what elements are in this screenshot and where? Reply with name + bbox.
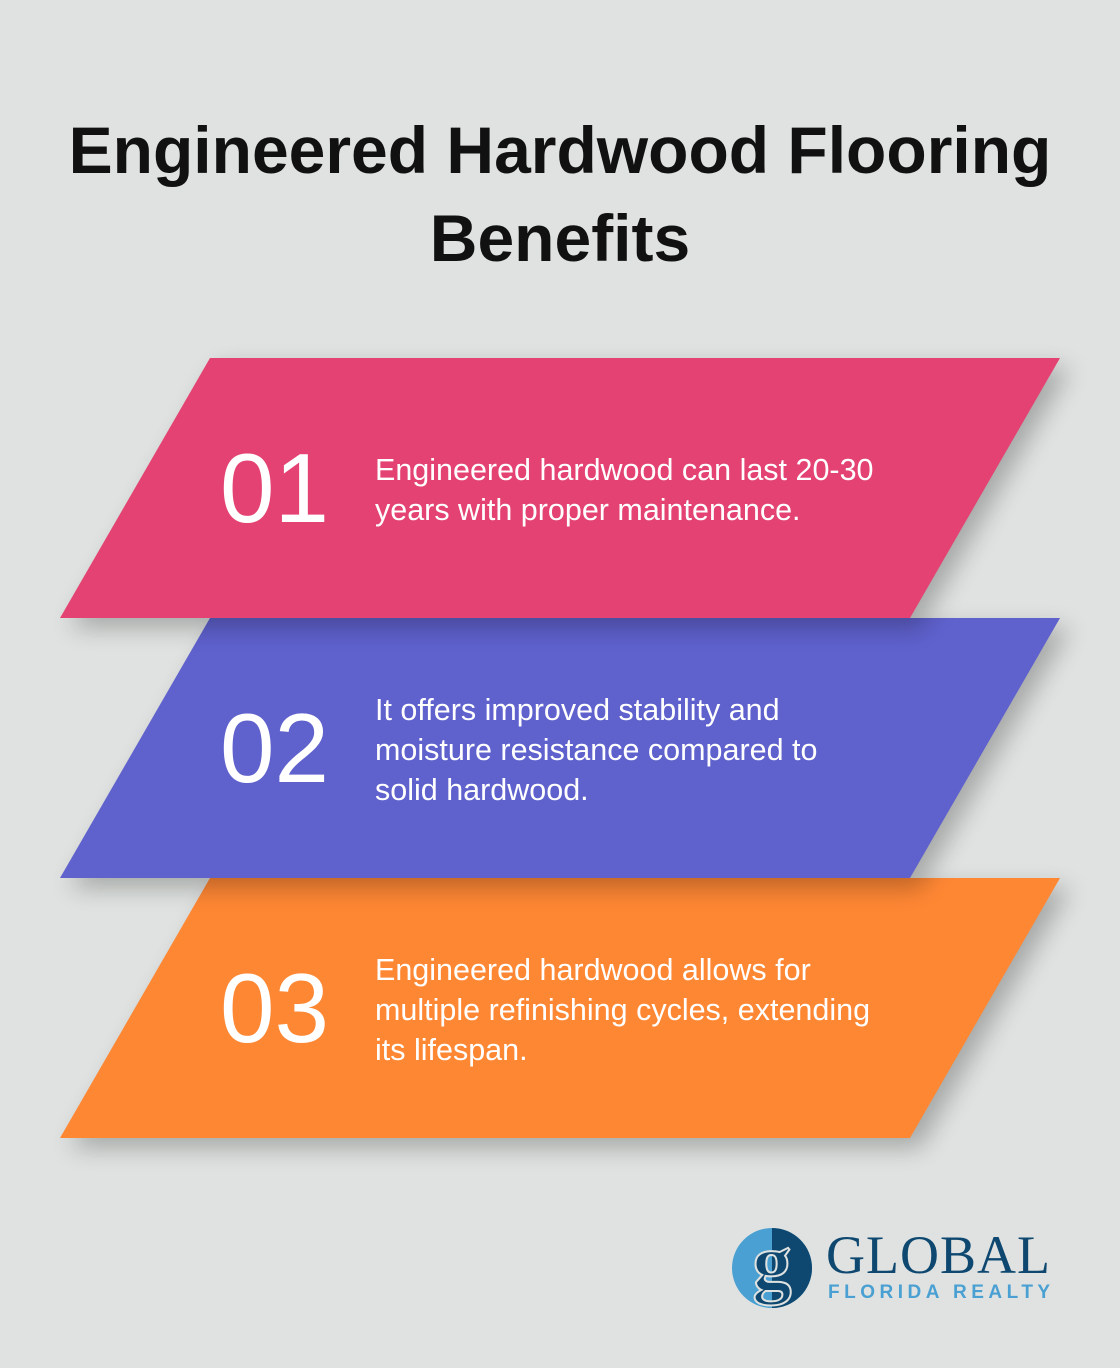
- text 01: years with proper maintenance.: [375, 493, 801, 527]
- title: Engineered Hardwood Flooring: [69, 113, 1051, 187]
- text 02: [375, 693, 817, 807]
- text 02: It offers improved stability and: [375, 693, 780, 727]
- band 1: [60, 356, 1073, 640]
- text 01: Engineered hardwood can last 20-30: [375, 453, 874, 487]
- band 2: [60, 616, 1073, 900]
- title: [69, 113, 1051, 275]
- logo icon: [732, 1226, 812, 1308]
- text 02: solid hardwood.: [375, 773, 589, 807]
- title: Benefits: [430, 201, 690, 275]
- logo: FLORIDA REALTY: [828, 1282, 1055, 1303]
- logo: [732, 1225, 1055, 1308]
- number 03: 03: [220, 953, 329, 1063]
- text 03: [375, 953, 870, 1067]
- text 03: Engineered hardwood allows for: [375, 953, 811, 987]
- number 01: 01: [220, 433, 329, 543]
- text 01: [375, 453, 874, 527]
- number 02: 02: [220, 693, 329, 803]
- logo text: GLOBAL: [826, 1225, 1051, 1285]
- text 03: multiple refinishing cycles, extending: [375, 993, 870, 1027]
- band 3: [60, 876, 1073, 1160]
- text 03: its lifespan.: [375, 1033, 528, 1067]
- text 02: moisture resistance compared to: [375, 733, 817, 767]
